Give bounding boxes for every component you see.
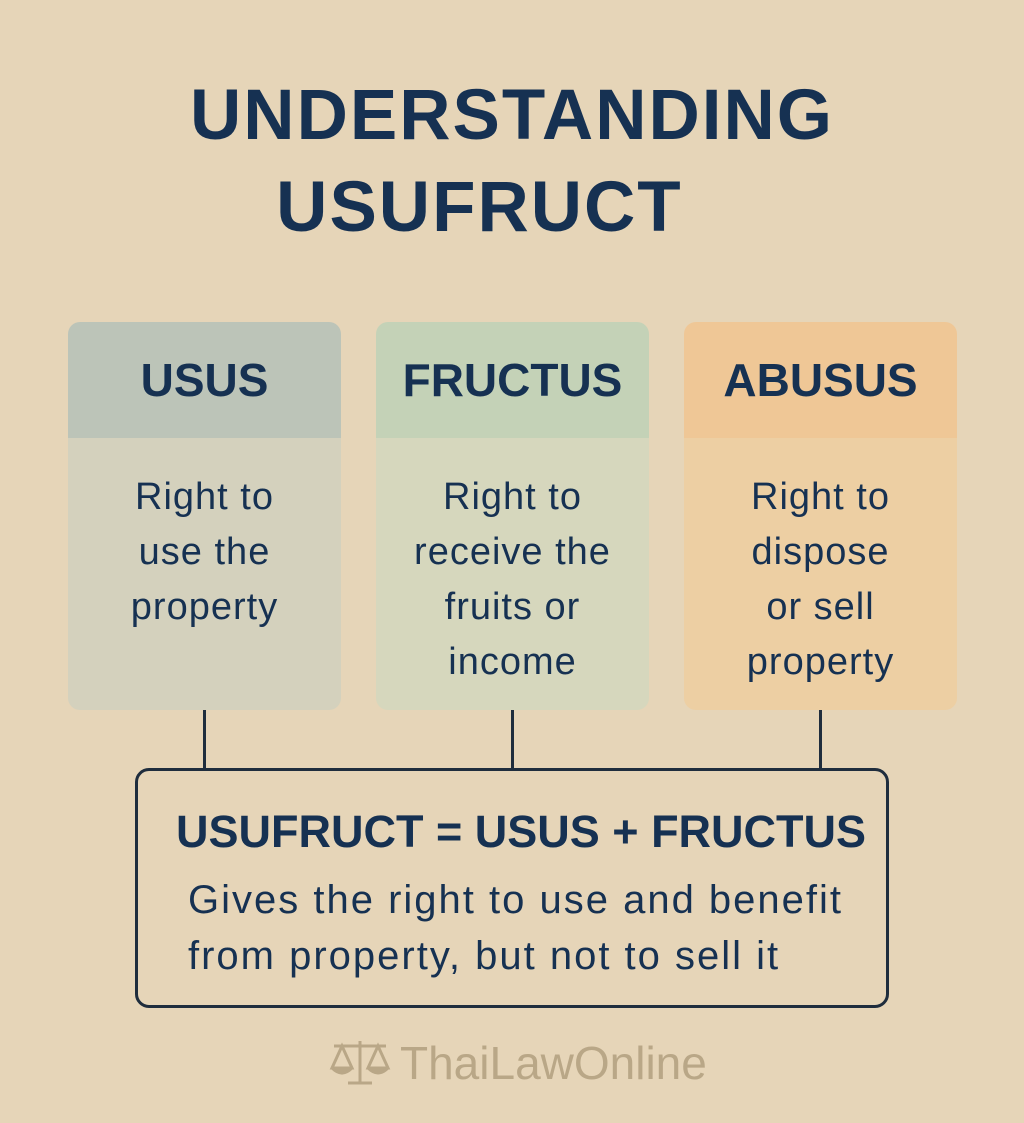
text: abusus: dispose <box>752 531 889 573</box>
text: fructus: fruits or <box>445 586 580 628</box>
panel: abusus <box>684 322 957 710</box>
text: usus: use the <box>139 531 270 573</box>
text: fructus: receive the <box>414 531 611 573</box>
title <box>190 76 834 247</box>
text: usus: property <box>131 586 278 628</box>
logo text: ThaiLawOnline <box>400 1037 707 1089</box>
heading: abusus: ABUSUS <box>723 354 918 406</box>
heading: fructus <box>376 322 649 438</box>
text: abusus <box>684 438 957 710</box>
title: USUFRUCT <box>276 168 683 247</box>
title: UNDERSTANDING <box>190 76 834 155</box>
text: abusus: or sell <box>766 586 875 628</box>
connector lines <box>203 710 822 768</box>
logo <box>330 1037 707 1089</box>
text: abusus: property <box>747 641 894 683</box>
text: usus: Right to <box>135 476 274 518</box>
heading: abusus <box>684 322 957 438</box>
text: fructus: Right to <box>443 476 582 518</box>
panel: usus <box>68 322 341 710</box>
icon: scales <box>330 1041 390 1084</box>
description <box>188 878 843 978</box>
text: usus <box>68 438 341 710</box>
description: Gives the right to use and benefit <box>188 878 843 922</box>
text: abusus: Right to <box>751 476 890 518</box>
description: from property, but not to sell it <box>188 934 780 978</box>
formula: USUFRUCT = USUS + FRUCTUS <box>176 806 866 857</box>
heading: usus <box>68 322 341 438</box>
heading: usus: USUS <box>141 354 268 406</box>
panel: fructus <box>376 322 649 710</box>
text: fructus: income <box>448 641 577 683</box>
heading: fructus: FRUCTUS <box>403 354 622 406</box>
summary box <box>135 768 889 1008</box>
text: fructus <box>376 438 649 710</box>
